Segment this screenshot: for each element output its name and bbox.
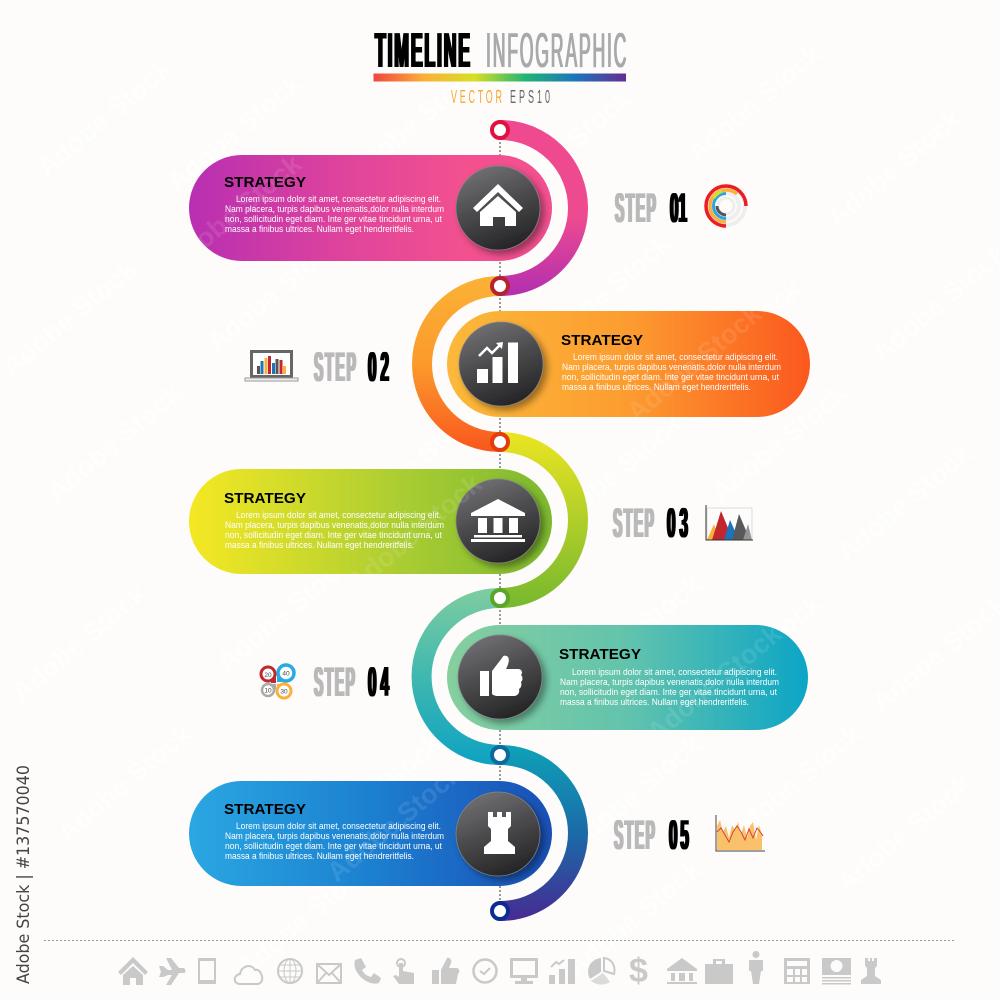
watermark: Adobe Stock [561,568,708,698]
watermark: Adobe Stock [301,728,448,858]
step 3 body text: Lorem ipsum dolor sit amet, consectetur adipiscing elit. [236,510,441,520]
panel: step 2 [447,311,810,417]
timeline nodes [492,122,508,919]
step 5 heading: STRATEGY [224,801,306,818]
step 4 body text: non, sollicitudin eget diam. Inte ger vitae tincidunt urna, ut [560,687,777,697]
icon: radial progress chart [706,186,746,226]
icon: rook button [456,792,540,876]
watermark: Adobe Stock [211,548,358,678]
panel watermark: Adobe Stock [341,468,488,598]
step 5 body text: massa a finibus ultrices. Nullam eget hendreritfelis. [225,851,414,861]
watermark: Adobe Stock [201,228,348,358]
step 4 label [314,657,389,705]
watermark: Adobe Stock [231,853,378,983]
watermark: Adobe Stock [681,588,828,718]
step 5 label: 05 [669,810,689,858]
watermark: Adobe Stock [681,38,828,168]
bottom icon row [118,951,881,990]
watermark: Adobe Stock [6,578,153,708]
panel watermark: Adobe Stock [621,298,768,428]
step 2 body text [562,352,781,392]
icon: calculator [784,958,810,984]
watermark: Adobe Stock [161,68,308,198]
step 3 body text: Nam placera, turpis dapibus venenatis,dolor nulla interdum [225,520,444,530]
step 5 body text [225,821,444,861]
step 1 label: 01 [670,183,687,231]
step 4 body text: Nam placera, turpis dapibus venenatis,dolor nulla interdum [560,677,779,687]
step 2 heading: STRATEGY [561,332,643,349]
icon: person [749,951,763,984]
step 5 body text: Lorem ipsum dolor sit amet, consectetur adipiscing elit. [236,821,441,831]
panel: step 5 [189,781,552,886]
step 5 body text: non, sollicitudin eget diam. Inte ger vitae tincidunt urna, ut [225,841,442,851]
icon: pie chart [588,958,615,985]
icon: touch [393,959,414,984]
watermark: Adobe Stock [41,378,188,508]
watermark: Adobe Stock [341,58,488,188]
step 3 label [613,498,688,546]
step 5 label: STEP [614,811,655,858]
icon: area line chart [716,815,765,851]
rainbow bar [374,74,626,82]
icon: monitor [510,958,538,984]
subtitle [451,88,550,108]
watermark: Adobe Stock [821,103,968,233]
step 4 heading: STRATEGY [559,646,641,663]
watermark: Adobe Stock [51,718,198,848]
watermark: Adobe Stock [561,728,708,858]
step 5 label [614,810,689,858]
step 3 body text: massa a finibus ultrices. Nullam eget hendreritfelis. [225,540,414,550]
watermark: Adobe Stock [661,273,808,403]
icon: mountain chart [706,505,753,540]
step 2 body text: Nam placera, turpis dapibus venenatis,dolor nulla interdum [562,362,781,372]
icon: cloud [235,966,262,984]
icon: rook [861,958,881,984]
icon: tablet [198,958,216,984]
watermark: Adobe Stock [31,53,178,183]
watermark: Adobe Stock [831,768,978,898]
step 4 body text: Lorem ipsum dolor sit amet, consectetur adipiscing elit. [572,667,777,677]
step 4 label: 04 [368,657,389,705]
icon: bar chart [549,959,575,984]
step 2 label [314,342,389,390]
icon: clock [474,960,496,982]
credit text: Adobe Stock | #137570040 [14,765,34,984]
icon: number bubbles: 20 [264,672,272,679]
icon: envelope [317,964,341,983]
panel watermark: Adobe Stock [161,148,308,278]
icon: dollar: $ [629,952,648,990]
step 1 body text: non, sollicitudin eget diam. Inte ger vitae tincidunt urna, ut [225,214,442,224]
step 1 body text: Lorem ipsum dolor sit amet, consectetur adipiscing elit. [236,194,441,204]
panel: step 4 [447,625,808,730]
icon: bank button [456,479,540,563]
timeline ribbon [422,130,578,911]
icon: house [118,957,148,985]
panel watermark: Adobe Stock [641,618,788,748]
step 4 body text: massa a finibus ultrices. Nullam eget hendreritfelis. [560,697,749,707]
watermark: Adobe Stock [561,853,708,983]
step 1 label [615,183,687,231]
icon: number bubbles: 40 [282,670,290,678]
watermark: Adobe Stock [531,228,678,358]
icon: bank [667,958,697,984]
panel watermark: Adobe Stock [321,758,468,888]
title: TIMELINE [375,23,470,78]
subtitle: VECTOR [451,88,502,108]
panel watermark [161,148,788,888]
divider [44,940,955,942]
icon: plane [159,958,186,985]
icon: thumb [432,958,459,984]
watermark: Adobe Stock [541,408,688,538]
step 2 label: 02 [368,342,389,390]
icon: thumbs up button [458,635,542,719]
step 1 body text [225,194,444,234]
step 2 body text: non, sollicitudin eget diam. Inte ger vitae tincidunt urna, ut [562,372,779,382]
icon: laptop bar chart [245,350,298,381]
step 3 body text: non, sollicitudin eget diam. Inte ger vitae tincidunt urna, ut [225,530,442,540]
watermark: Adobe Stock [491,83,638,213]
step 1 body text: massa a finibus ultrices. Nullam eget hendreritfelis. [225,224,414,234]
step 1 label: STEP [615,184,656,231]
step 2 body text: massa a finibus ultrices. Nullam eget hendreritfelis. [562,382,751,392]
step 3 heading: STRATEGY [224,490,306,507]
icon: number bubbles [261,665,294,698]
panel: step 3 [189,469,552,574]
icon: number bubbles: 10 [264,688,272,694]
step 2 body text: Lorem ipsum dolor sit amet, consectetur adipiscing elit. [573,352,778,362]
watermark: Adobe Stock [0,253,143,383]
title: INFOGRAPHIC [486,23,626,78]
watermark: Adobe Stock [721,718,868,848]
subtitle: EPS10 [510,88,550,108]
icon: globe [278,959,302,983]
step 3 label: 03 [667,498,688,546]
step 3 body text [225,510,444,550]
icon: growth chart button [459,322,543,406]
step 2 label: STEP [314,343,356,390]
step 3 label: STEP [613,499,654,546]
icon: home button [456,166,540,250]
watermark: Adobe Stock [831,438,978,568]
panel: step 1 [189,155,552,261]
step 1 heading: STRATEGY [224,174,306,191]
step 4 body text [560,667,779,707]
watermark: Adobe Stock [706,378,853,508]
dotted centre line [499,130,501,911]
step 4 label: STEP [314,658,355,705]
step 5 body text: Nam placera, turpis dapibus venenatis,dolor nulla interdum [225,831,444,841]
step 1 body text: Nam placera, turpis dapibus venenatis,dolor nulla interdum [225,204,444,214]
title [375,23,626,78]
icon: banknote [822,958,851,984]
icon: number bubbles: 30 [280,688,288,696]
icon: telephone [354,958,381,984]
watermark: Adobe Stock [341,398,488,528]
icon: briefcase [705,959,733,984]
